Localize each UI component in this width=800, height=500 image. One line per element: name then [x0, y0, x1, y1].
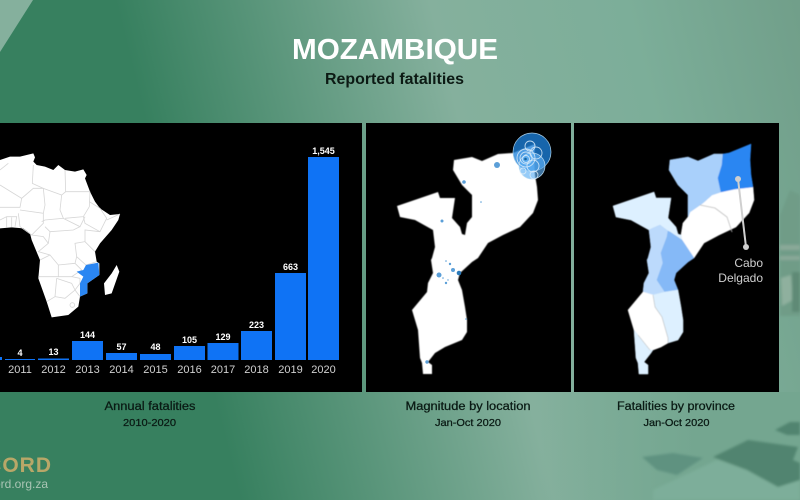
bar chart: annual fatalities: 663: [283, 262, 298, 272]
callout: Cabo Delgado: Delgado: [718, 271, 763, 285]
province: Cabo Delgado: [718, 144, 753, 192]
caption: fatalities by province: [617, 401, 735, 429]
province: Inhambane: [653, 290, 683, 343]
panel: fatalities by province: [574, 123, 779, 392]
bar chart: annual fatalities: 2016: [177, 364, 202, 376]
bar chart: annual fatalities: 2020: [311, 364, 336, 376]
map: Mozambique silhouette: [397, 144, 538, 374]
province: Nampula and Zambezia: [681, 187, 754, 258]
bar chart: annual fatalities: 2011: [8, 364, 32, 376]
caption: annual fatalities: Annual fatalities: [104, 401, 196, 413]
province: Manica: [643, 225, 668, 295]
bar chart: annual fatalities: 1,545: [312, 146, 335, 156]
bar chart: annual fatalities: 2012: [41, 364, 66, 376]
bar chart: annual fatalities: 2014: [109, 364, 134, 376]
bar chart: annual fatalities: 13: [48, 347, 59, 357]
province: Maputo: [634, 330, 653, 374]
bar chart: annual fatalities: 2019: [278, 364, 303, 376]
caption: annual fatalities: 2010-2020: [123, 417, 176, 429]
bar chart: annual fatalities: 129: [215, 332, 231, 342]
bar chart: annual fatalities: 2017: [211, 364, 235, 376]
callout: Cabo Delgado: Cabo: [734, 256, 763, 270]
bar chart: annual fatalities: 2013: [75, 364, 100, 376]
panel: magnitude by location: [366, 123, 571, 392]
caption: fatalities by province: Jan-Oct 2020: [644, 417, 710, 429]
bubbles: smaller incidents: [425, 162, 500, 364]
caption: fatalities by province: Fatalities by province: [617, 401, 735, 413]
panel: annual fatalities: [0, 123, 362, 392]
bar chart: annual fatalities: 223: [249, 320, 264, 330]
province: Tete: [613, 192, 682, 240]
logo: ACCORD: [0, 454, 52, 491]
bar chart: annual fatalities: 4: [17, 348, 23, 358]
province: Sofala: [657, 231, 694, 292]
title: MOZAMBIQUE: [292, 34, 498, 66]
map: provinces choropleth: [613, 144, 754, 374]
bar chart: annual fatalities: 57: [116, 342, 127, 352]
bar chart: annual fatalities: 48: [150, 342, 161, 352]
bar chart: annual fatalities: [0, 146, 339, 376]
subtitle: Reported fatalities: [325, 71, 464, 88]
caption: magnitude by location: [406, 401, 530, 429]
province: Niassa: [669, 154, 723, 217]
bar chart: annual fatalities: 2015: [143, 364, 168, 376]
bubbles: Cabo Delgado cluster: [513, 133, 551, 179]
bar chart: annual fatalities: 144: [80, 330, 95, 340]
province: Gaza: [628, 292, 668, 350]
caption: magnitude by location: Magnitude by location: [406, 401, 530, 413]
caption: annual fatalities: [104, 401, 196, 429]
map: Africa locator: [0, 153, 120, 317]
callout: Cabo Delgado: [718, 176, 763, 285]
bar chart: annual fatalities: 105: [182, 335, 197, 345]
caption: magnitude by location: Jan-Oct 2020: [435, 417, 501, 429]
bar chart: annual fatalities: 2018: [244, 364, 269, 376]
